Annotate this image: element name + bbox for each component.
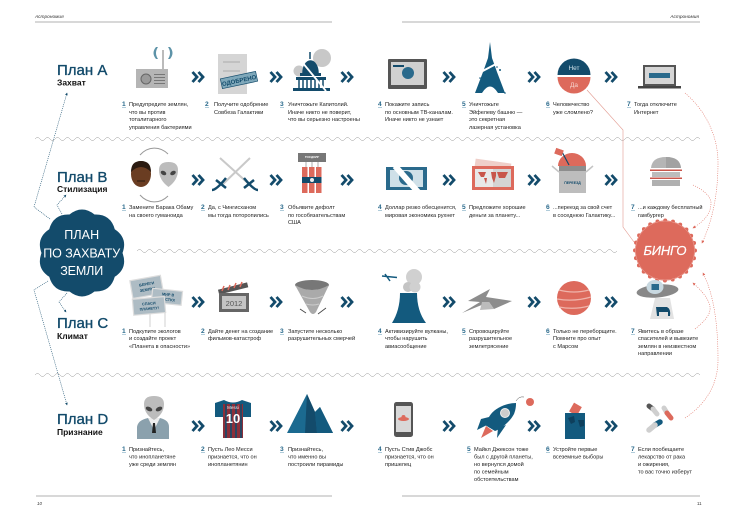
step text: plan B: ...переезд за свой счет (553, 204, 613, 211)
plan titles: Захват (57, 78, 86, 88)
icon: ballot box (565, 403, 585, 439)
icon: rocket and planet (477, 397, 534, 438)
step text: plan C: 2 (201, 328, 205, 335)
icon: striped planet (557, 281, 591, 315)
step text: plan D: Если пообещаете (638, 447, 684, 453)
step text: plan D: признается, что он (208, 454, 257, 460)
bingo seal (635, 220, 695, 280)
icon: Messi jersey: Messi (227, 405, 239, 410)
central blob: plan to conquer Earth (40, 209, 124, 297)
step text: plan D: то вас точно изберут (638, 470, 692, 476)
step text: plan A: Получите одобрение (214, 102, 268, 108)
icon: protest signs: ЗЕМЛЮ! (139, 286, 156, 293)
step text: plan B: 3 (280, 204, 284, 211)
step text: plan C: Подкупите экологов (129, 329, 181, 335)
step text: plan D: построили пирамиды (288, 462, 343, 468)
step text: plan A: Иначе никто не узнает (385, 117, 444, 123)
step text: plan A: Совбеза Галактики (214, 110, 263, 116)
step text: plan C: Запустите несколько (288, 329, 342, 335)
icon: Messi jersey: 10 (226, 411, 240, 426)
step text: plan B: 6 (546, 204, 550, 211)
step text: plan D: 4 (378, 446, 382, 453)
step text: plan A: 7 (627, 101, 631, 108)
icon: approved document: ОДОБРЕНО (222, 75, 257, 88)
plan titles: Климат (57, 331, 88, 341)
step text: plan B: 2 (201, 204, 205, 211)
step text: plan B: Замените Барака Обаму (129, 205, 194, 211)
step text: plan D: но вернулся домой (474, 461, 524, 468)
step text: plan D: Признайтесь, (129, 446, 164, 453)
step text: plan A: Тогда отключите (634, 102, 677, 108)
icon: protest signs (130, 275, 183, 327)
step text: plan C: «Планета в опасности» (129, 344, 190, 350)
step text: plan D: 7 (631, 446, 635, 453)
step text: plan B: Да, с Чингисханом (208, 205, 256, 211)
step text: plan C: с Марсом (553, 344, 578, 350)
plan titles: Стилизация (57, 184, 107, 194)
icon: film clapboard (218, 282, 249, 312)
plan titles (57, 62, 108, 437)
step text: plan A: Эйфелеву башню — (469, 109, 523, 116)
step text: plan C: фильмов-катастроф (208, 336, 261, 342)
step text: plan D: Устройте первые (553, 446, 597, 453)
step text: plan A: 3 (280, 101, 284, 108)
step text: plan C: землян в неизвестном (638, 344, 696, 350)
step text: plan B: деньги за планету... (469, 213, 521, 219)
step text: plan A: 4 (378, 101, 382, 108)
step text: plan D: по семейным (474, 468, 509, 476)
step text: plan D: 5 (467, 446, 471, 453)
icon: pills (649, 406, 671, 430)
step text: plan A (122, 101, 677, 131)
step text: plan D: 3 (280, 446, 284, 453)
step text: plan B: 7 (631, 204, 635, 211)
step text: plan C: 3 (280, 328, 284, 335)
step text: plan C: 7 (631, 328, 635, 335)
icon: moving box with dome (552, 148, 593, 193)
step text: plan C: 5 (462, 328, 466, 335)
step text: plan A: Интернет (634, 110, 659, 116)
step text: plan C: Дайте денег на создание (208, 328, 273, 335)
icon: protest signs: КОСТЮ! (160, 297, 175, 303)
step text: plan C: направлении (638, 351, 672, 357)
step text: plan D: Пусть Стив Джобс (385, 447, 433, 453)
step text: plan A: тоталитарного (129, 117, 166, 123)
icon: destroyed Capitol (293, 49, 331, 91)
icon: Eiffel tower (475, 42, 506, 94)
step text: plan C: разрушительных смерчей (288, 335, 355, 342)
chevron arrows (192, 72, 616, 431)
step text: plan D: Майкл Джексон тоже (474, 446, 528, 453)
page number left: 10 (37, 501, 42, 506)
step text: plan A: уже сломлено? (553, 110, 593, 116)
step text: plan C: Явитесь в образе (638, 329, 684, 335)
step text: plan D: лекарство от рака (638, 454, 686, 460)
plan titles: План С (57, 315, 108, 332)
plan titles: Признание (57, 427, 103, 437)
step text: plan A: что вы против (129, 110, 165, 116)
step text: plan A: что вы серьезно настроены (288, 117, 360, 123)
step text: plan C: Активизируйте вулканы, (385, 328, 448, 335)
step text: plan C: спасителей и вывезите (638, 335, 698, 342)
central blob: plan to conquer Earth: ЗЕМЛИ (60, 264, 103, 278)
icon: smartphone (394, 402, 413, 437)
step text: plan C: и создайте проект (129, 335, 177, 342)
red connector lines (587, 90, 718, 418)
icon: banknote (386, 166, 427, 192)
central blob: plan to conquer Earth: ПЛАН (64, 228, 99, 242)
step text: plan B: США (288, 220, 301, 226)
step text: plan B: гамбургер (638, 213, 664, 219)
header left: Астрономия (34, 14, 64, 20)
step text: plan D: 2 (201, 446, 205, 453)
page number right: 11 (697, 501, 702, 506)
icon: Messi jersey (215, 400, 251, 438)
step text: plan B: на своего гуманоида (129, 213, 184, 219)
step text: plan A: Уничтожьте (469, 102, 499, 108)
step text: plan D: был с другой планеты, (474, 454, 533, 460)
step text: plan C: авиасообщение (385, 344, 427, 350)
icon: moving box with dome: ПЕРЕЕЗД (564, 181, 581, 185)
step text: plan C: 1 (122, 328, 126, 335)
icon: yes/no choice: Да (570, 82, 578, 89)
icon: laptop (638, 65, 681, 88)
step text: plan D: и ожирения, (638, 462, 670, 468)
bingo seal: БИНГО (644, 243, 686, 258)
step text: plan A: Уничтожьте Капитолий. (288, 101, 349, 108)
icon: crossed swords (212, 158, 258, 190)
step text: plan B: ...и каждому бесплатный (638, 204, 703, 211)
step text: plan C: 6 (546, 328, 550, 335)
step text: plan A: лазерная установка (469, 125, 522, 131)
step text: plan A: 5 (462, 101, 466, 108)
icon: approved document (218, 54, 258, 94)
step text: plan A: 2 (205, 101, 209, 108)
step text: plan C: 4 (378, 328, 382, 335)
step text: plan B: по гособязательствам (288, 213, 345, 219)
step text: plan A: 6 (546, 101, 550, 108)
icon: Obama and alien swap (131, 148, 178, 202)
central blob: plan to conquer Earth: ПО ЗАХВАТУ (43, 246, 120, 260)
icon: radio (136, 47, 172, 88)
step text: plan A: управления бактериями (129, 125, 192, 131)
plan titles: План В (57, 169, 107, 186)
step text: plan A: Иначе никто не поверит, (288, 110, 352, 116)
step text: plan B: Предложите хорошие (469, 205, 526, 211)
icon: earthquake crack (462, 289, 512, 313)
step text: plan C: Спровоцируйте (469, 328, 509, 335)
step text: plan D: инопланетянин (208, 462, 248, 468)
step text: plan B: 1 (122, 204, 126, 211)
step text: plan D: обстоятельствам (474, 477, 519, 483)
step text: plan C: чтобы нарушить (385, 336, 428, 342)
step text: plan C: Только не переборщите. (553, 329, 617, 335)
step text: plan D: 1 (122, 446, 126, 453)
step text: plan D: 6 (546, 446, 550, 453)
step text: plan D: Пусть Лео Месси (208, 447, 253, 453)
step text: plan A: Человечество (553, 102, 589, 108)
icon: protest signs: БЕРЕГИ (139, 281, 155, 288)
icon: tornado (295, 280, 329, 314)
icon: volcano and plane (382, 269, 426, 323)
step text: plan B: мы тогда поторопились (208, 213, 269, 219)
icon: dynamite: ГОСДОЛГ (305, 155, 319, 159)
icon: alien in suit (137, 396, 169, 439)
step text: plan C (122, 328, 698, 357)
icon: protest signs: СПАСИ (142, 301, 156, 307)
step text: plan D: всеземные выборы (553, 454, 603, 460)
step text: plan B: 5 (462, 204, 466, 211)
step text: plan A: по основным ТВ-каналам. (385, 110, 453, 116)
icon: yes/no choice: Нет (568, 65, 580, 72)
navy dotted connectors (34, 93, 67, 405)
step text: plan B: Доллар резко обесценится, (385, 205, 457, 211)
plan titles: План А (57, 62, 107, 79)
icon: protest signs: МИР В (162, 292, 175, 298)
step text: plan A: это секретная (469, 117, 505, 123)
step text: plan B: в соседнюю Галактику... (553, 213, 616, 219)
step text: plan D: пришелец (385, 462, 412, 468)
icon: dynamite (298, 153, 326, 193)
step text: plan B (122, 204, 703, 226)
icon: UFO abducting a cow (636, 280, 679, 319)
step text: plan B: Объявите дефолт (288, 205, 335, 211)
icon: hamburger (650, 157, 682, 186)
step text: plan A: Предупредите землян, (129, 102, 189, 108)
plan titles: План D (57, 411, 108, 428)
step text: plan D: что инопланетяне (129, 454, 176, 460)
step text: plan C: Помните про опыт (553, 336, 601, 342)
step text: plan A: 1 (122, 101, 126, 108)
step text: plan A: Покажите запись (385, 102, 429, 108)
header right: Астрономия (669, 14, 699, 20)
step text: plan C: разрушительное (469, 336, 512, 342)
icon: money with world map (472, 159, 514, 190)
step text: plan D: Признайтесь, (288, 446, 323, 453)
icon: film clapboard: 2012 (226, 299, 242, 308)
step text: plan D: признается, что он (385, 454, 434, 460)
step text: plan D: что именно вы (288, 454, 326, 460)
icon: TV tablet (388, 59, 427, 89)
icon: yes/no choice (558, 58, 590, 94)
step text: plan D: уже среди землян (129, 462, 176, 468)
icon: pyramids (287, 394, 333, 433)
icon: protest signs: ПЛАНЕТУ! (139, 306, 159, 312)
step text: plan B: мировая экономика рухнет (385, 213, 455, 219)
step text: plan D (122, 446, 692, 483)
step text: plan B: 4 (378, 204, 382, 211)
step text: plan C: землетрясение (469, 344, 509, 350)
